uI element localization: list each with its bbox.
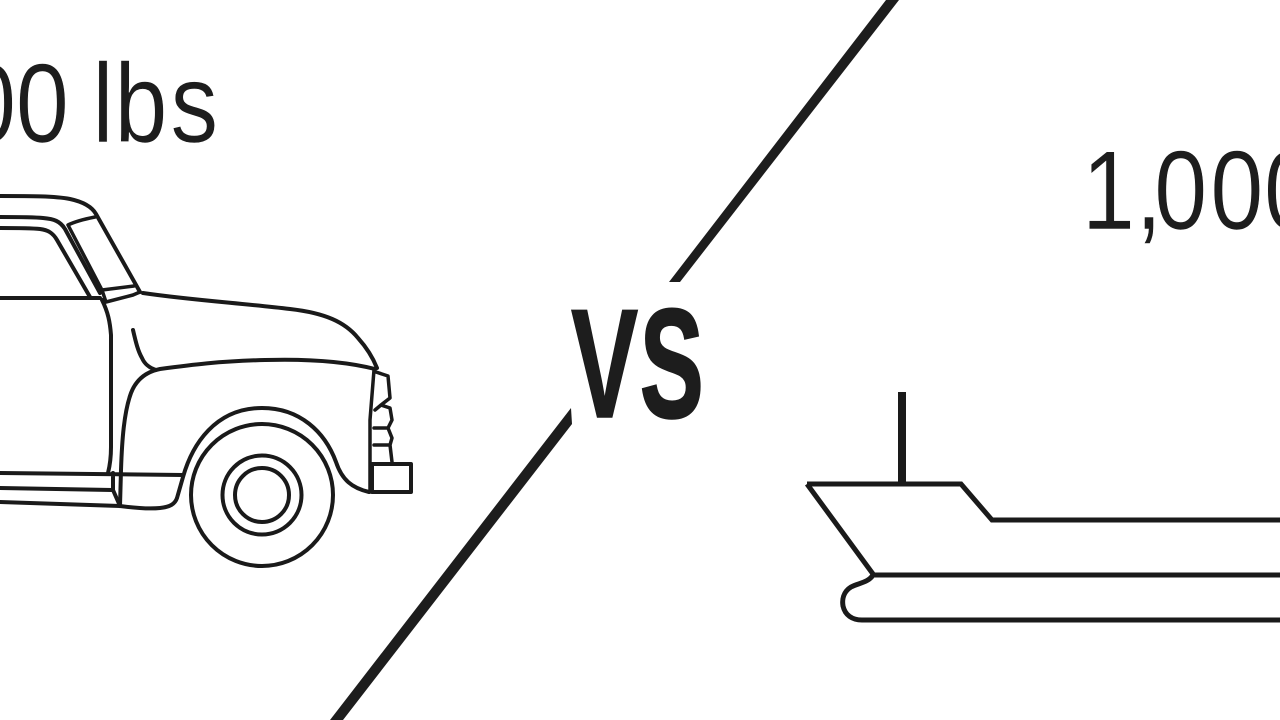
truck bumper (372, 464, 411, 492)
divider: lower diagonal (330, 408, 572, 720)
truck grille (370, 370, 392, 492)
icon: pickup truck (0, 196, 411, 566)
truck wheel arch (120, 408, 369, 508)
ship bow (807, 484, 873, 574)
truck front wheel (191, 424, 333, 566)
ship bulbous hull (843, 575, 1280, 620)
truck door edge (102, 300, 111, 473)
truck window (0, 228, 100, 298)
truck roof and windshield pillar (0, 196, 140, 292)
truck windshield (68, 217, 140, 302)
truck hood (143, 293, 377, 368)
divider: upper diagonal (669, 0, 899, 282)
truck fender crease (133, 330, 156, 370)
truck door frame (0, 217, 100, 293)
ship waterline (871, 572, 1280, 578)
heading: VS: V (571, 277, 638, 450)
heading: VS: S (640, 278, 704, 451)
truck fender (120, 360, 375, 506)
ship deck (807, 484, 1280, 520)
icon: cargo ship (807, 392, 1280, 620)
ship mast (898, 392, 906, 484)
truck running board (0, 473, 183, 506)
heading: VS (571, 277, 704, 451)
